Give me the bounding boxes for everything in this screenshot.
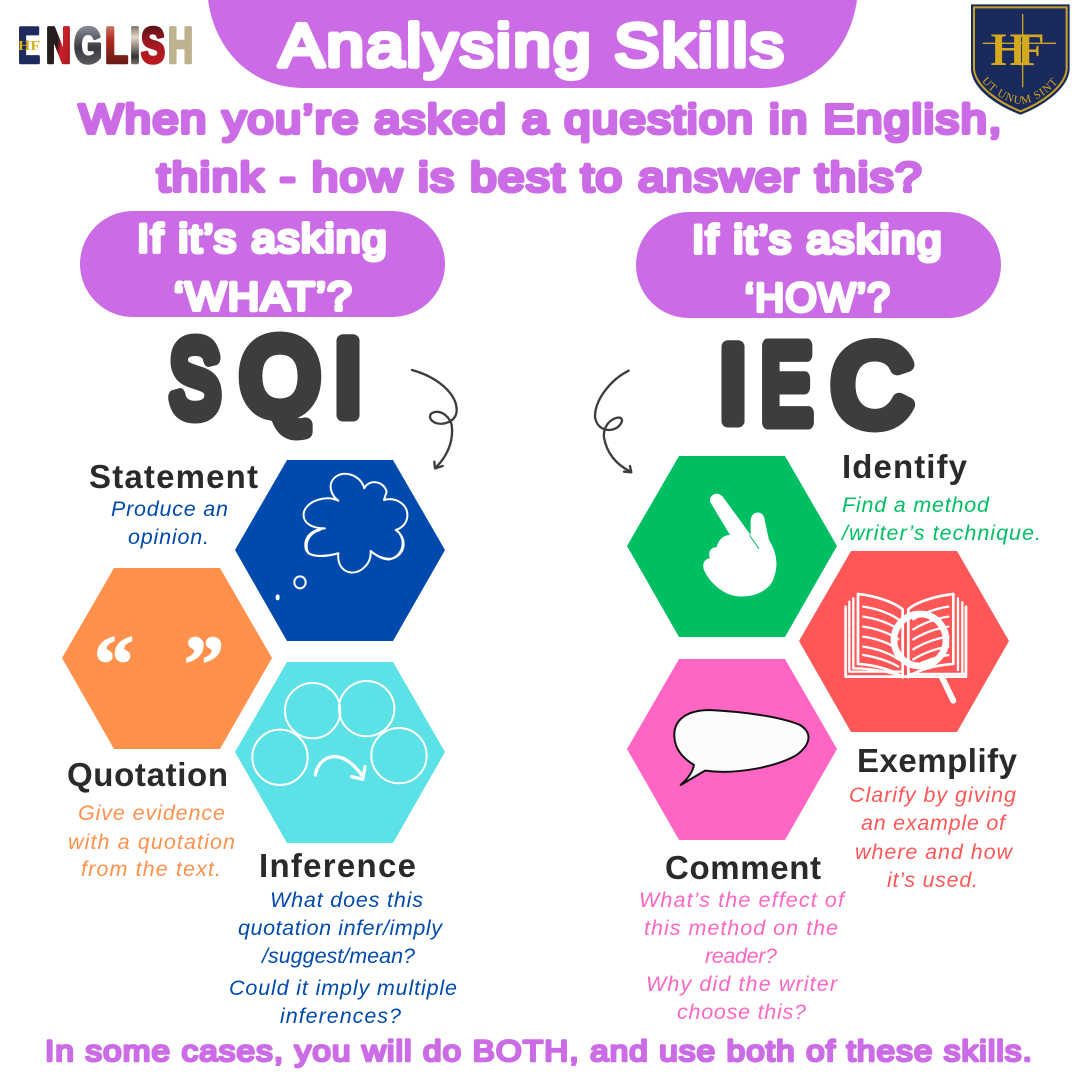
panel: quotation: from the text. — [81, 857, 221, 881]
panel: inference: inferences? — [280, 1004, 401, 1028]
logo: English: S — [141, 18, 165, 74]
icon: quotation marks: ” — [184, 621, 224, 709]
logo: English: HF — [18, 39, 40, 54]
panel: comment: this method on the — [644, 916, 838, 940]
logo: English — [18, 18, 193, 74]
heading: SQI: Q — [241, 318, 319, 436]
panel: comment: What’s the effect of — [639, 888, 846, 912]
heading: IEC: I — [718, 323, 748, 444]
pill: how: ‘HOW’? — [745, 276, 891, 320]
panel: comment: choose this? — [677, 1000, 806, 1024]
panel: quotation: with a quotation — [68, 830, 235, 854]
panel: comment: reader? — [705, 944, 777, 968]
panel: inference: Inference — [259, 847, 416, 884]
logo: school crest: UT UNUM SINT — [983, 76, 1057, 104]
panel: statement: Statement — [89, 458, 258, 495]
logo: English: I — [130, 18, 140, 74]
logo: English: H — [168, 18, 193, 74]
heading: IEC: E — [761, 323, 812, 446]
panel: exemplify: where and how — [855, 840, 1013, 864]
panel: statement — [89, 458, 445, 641]
panel: statement: opinion. — [128, 525, 209, 549]
icon: pointing hand — [703, 494, 776, 596]
panel: identify: Identify — [842, 448, 968, 485]
arrow: SQI to statement — [412, 370, 457, 468]
panel: identify: Find a method — [842, 493, 990, 517]
icon: quotation marks — [94, 621, 224, 709]
pill: what: If it’s asking — [137, 217, 388, 261]
panel: exemplify: it’s used. — [887, 868, 978, 892]
logo: school crest: H — [991, 24, 1026, 76]
panel: comment: Why did the writer — [646, 972, 838, 996]
panel: quotation: Give evidence — [78, 801, 225, 825]
heading: IEC: C — [832, 323, 912, 448]
logo: school crest — [971, 4, 1070, 115]
logo: English: E — [18, 18, 40, 74]
question heading — [79, 96, 1003, 200]
panel: inference: quotation infer/imply — [238, 916, 443, 940]
title: Analysing Skills — [279, 12, 786, 79]
icon: quotation marks: “ — [94, 621, 134, 709]
heading: SQI: S — [170, 320, 220, 438]
heading: SQI: I — [333, 317, 363, 438]
question heading: think - how is best to answer this? — [157, 154, 923, 200]
pill: what: ‘WHAT’? — [174, 275, 353, 319]
icon: linked circles — [252, 681, 427, 785]
question heading: When you’re asked a question in English, — [79, 96, 1003, 142]
panel: exemplify: Clarify by giving — [849, 783, 1016, 807]
logo: English: L — [105, 18, 128, 74]
panel: exemplify: Exemplify — [857, 742, 1018, 779]
heading: IEC — [718, 323, 912, 448]
panel: exemplify — [799, 551, 1018, 892]
panel: identify — [627, 448, 1041, 637]
panel: inference — [229, 662, 457, 1028]
panel: inference: Could it imply multiple — [229, 976, 457, 1000]
icon: thought cloud — [277, 474, 407, 599]
panel: quotation — [62, 568, 272, 881]
pill: how — [636, 212, 1001, 320]
icon: book and magnifying glass — [846, 594, 966, 701]
arrow: IEC to identify — [595, 371, 631, 472]
title banner — [208, 0, 857, 88]
panel: inference: What does this — [270, 888, 423, 912]
logo: school crest: F — [1018, 24, 1044, 76]
panel: identify: /writer’s technique. — [840, 521, 1041, 545]
panel: comment — [627, 659, 846, 1024]
pill: what — [80, 211, 445, 319]
logo: English: N — [46, 18, 71, 74]
panel: statement: Produce an — [111, 497, 228, 521]
icon: speech bubble — [674, 710, 808, 785]
pill: how: If it’s asking — [692, 218, 943, 262]
panel: exemplify: an example of — [861, 811, 1007, 835]
panel: quotation: Quotation — [67, 756, 228, 793]
heading: SQI — [170, 317, 363, 438]
panel: comment: Comment — [665, 849, 821, 886]
logo: English: G — [74, 18, 102, 74]
footer note: In some cases, you will do BOTH, and use both of these skills. — [45, 1035, 1033, 1068]
panel: inference: /suggest/mean? — [260, 944, 415, 968]
